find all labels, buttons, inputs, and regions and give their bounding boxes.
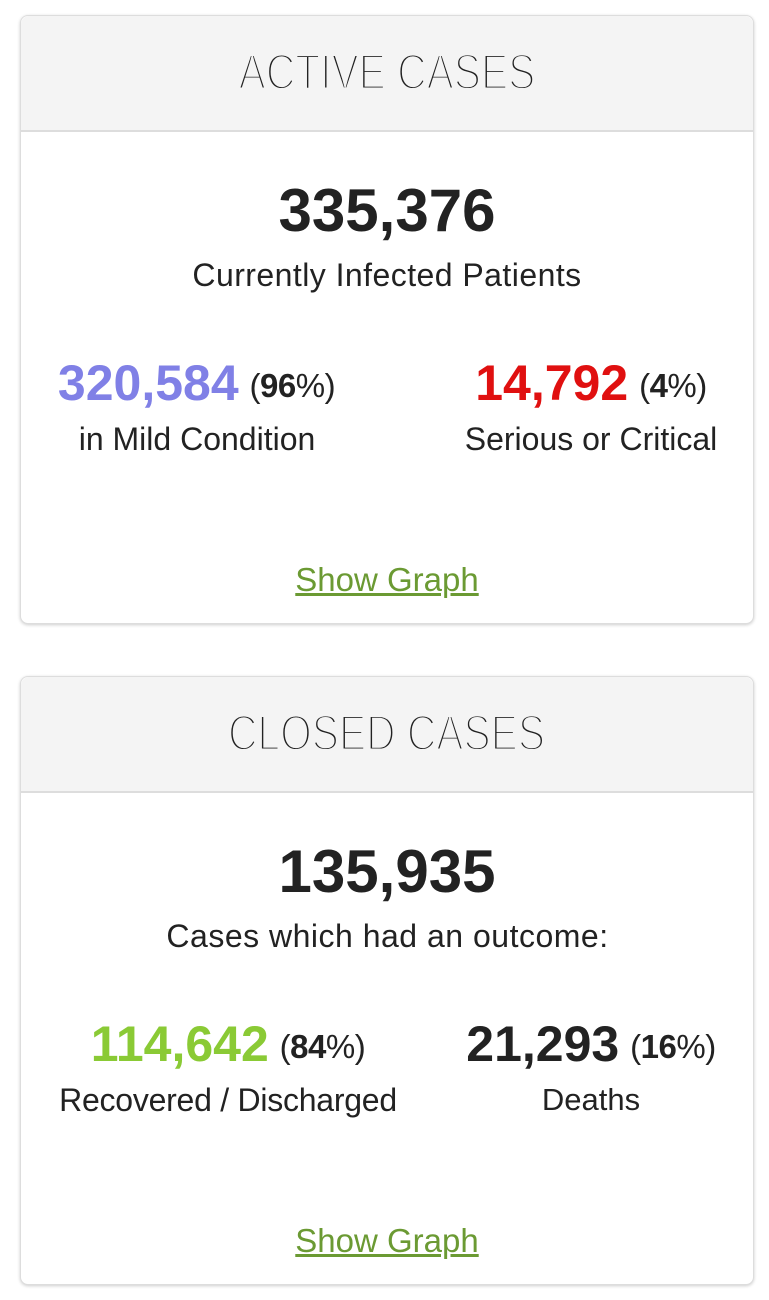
- label: mild condition: in Mild Condition: [79, 421, 315, 457]
- stat: mild condition: 320,584 (96%): [58, 355, 335, 411]
- label: serious or critical: Serious or Critical: [465, 421, 717, 457]
- link: show graph: Show Graph: [295, 1222, 479, 1259]
- link: show graph: Show Graph: [295, 561, 479, 598]
- caption: had an outcome: Cases which had an outcome:: [166, 918, 609, 954]
- stat: deaths: 21,293 (16%): [466, 1016, 716, 1072]
- panel: closed cases: [20, 676, 754, 1285]
- heading: active cases: ACTIVE CASES: [239, 44, 535, 100]
- stat: recovered: 114,642 (84%): [91, 1016, 365, 1072]
- heading: closed cases: CLOSED CASES: [228, 705, 546, 761]
- total active cases: 335,376: [279, 177, 495, 244]
- panel: active cases: [20, 15, 754, 624]
- total closed cases: 135,935: [279, 838, 495, 905]
- heading: closed cases: [21, 677, 753, 793]
- caption: currently infected: Currently Infected Patients: [192, 257, 582, 293]
- stat: serious or critical: 14,792 (4%): [475, 355, 707, 411]
- label: recovered: Recovered / Discharged: [59, 1082, 397, 1118]
- label: deaths: Deaths: [542, 1082, 640, 1117]
- heading: active cases: [21, 16, 753, 132]
